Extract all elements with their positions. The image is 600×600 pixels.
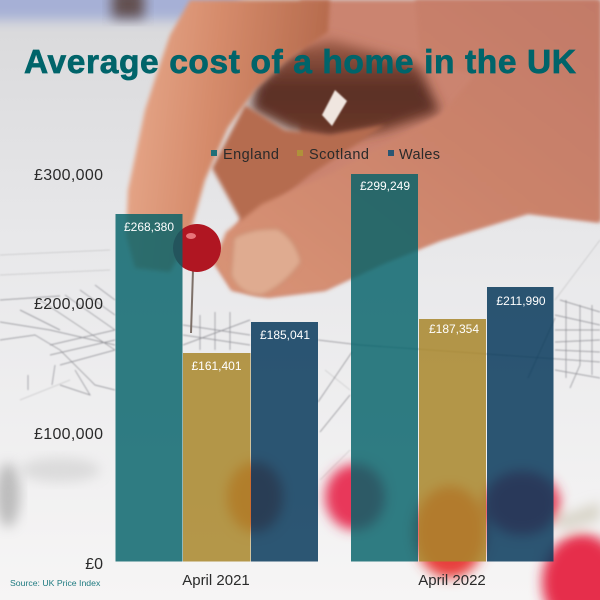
legend: England: England — [223, 147, 279, 163]
group: April 2022: £187,354 — [429, 322, 479, 336]
group: April 2021: £268,380 — [124, 220, 174, 234]
group: April 2021: £161,401 — [191, 359, 242, 373]
interior shadow of the grip — [250, 40, 440, 140]
legend: Scotland: Scotland — [309, 147, 369, 163]
group: April 2022: £299,249 — [360, 179, 410, 193]
y axis labels: £200,000 — [34, 296, 103, 313]
group: April 2021 — [116, 214, 318, 589]
y axis labels: £0 — [85, 556, 103, 573]
legend — [211, 147, 440, 163]
icon: red push pin — [173, 224, 221, 333]
map lines — [0, 285, 600, 432]
hand — [126, 0, 600, 297]
back of hand — [214, 0, 600, 297]
group: April 2021: April 2021 — [182, 572, 250, 589]
bar chart — [116, 174, 554, 589]
group: April 2022: £211,990 — [496, 294, 546, 308]
y axis labels: £300,000 — [34, 167, 103, 184]
legend: Wales: Wales — [399, 147, 440, 163]
group: April 2022: April 2022 — [418, 572, 486, 589]
gap between fingers — [322, 90, 347, 126]
middle finger — [212, 105, 385, 228]
blurred red pins — [227, 462, 600, 600]
index finger — [126, 0, 330, 272]
thumbnail — [231, 229, 301, 295]
y axis labels — [34, 167, 103, 573]
group: April 2022 — [351, 174, 554, 589]
thumb and palm — [214, 0, 600, 297]
source note: Source: UK Price Index — [10, 578, 101, 588]
group: April 2021: £185,041 — [260, 328, 310, 342]
title: Average cost of a home in the UK — [24, 44, 576, 81]
y axis labels: £100,000 — [34, 426, 103, 443]
